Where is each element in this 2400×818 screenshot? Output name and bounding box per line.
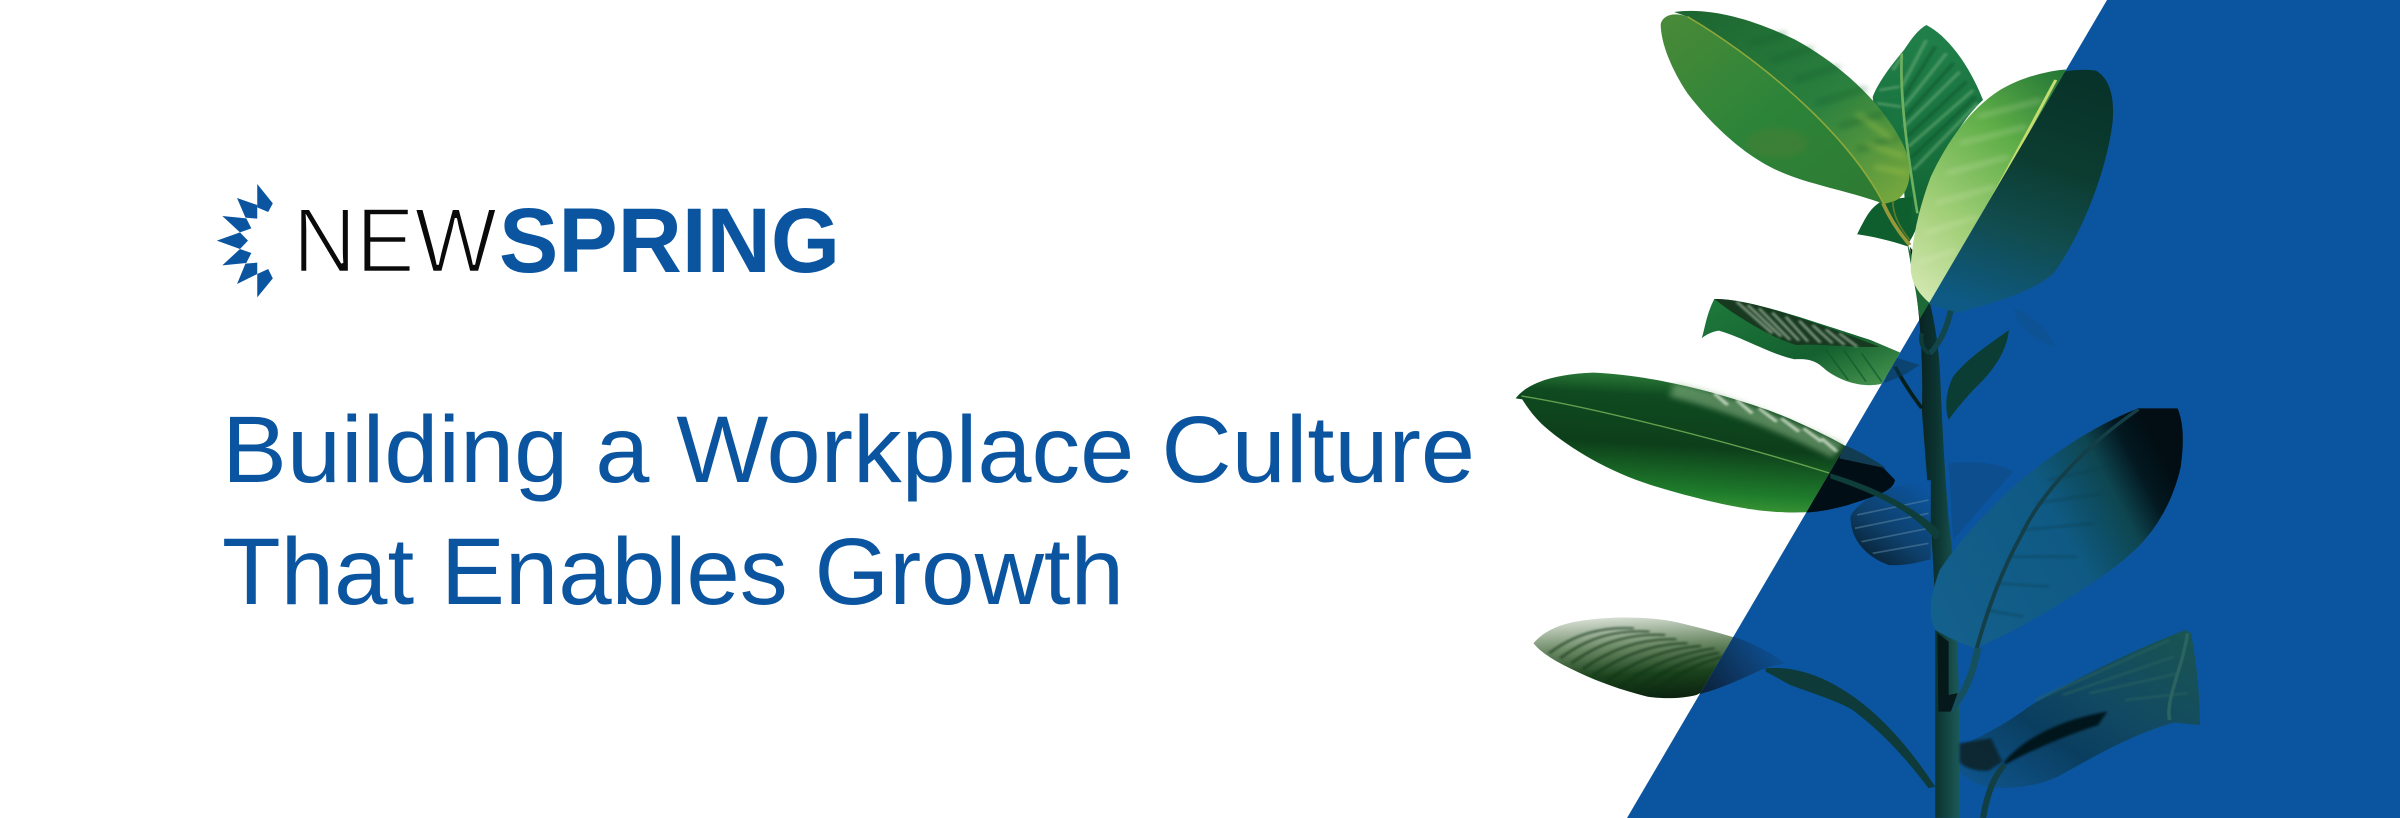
- blue diagonal panel: [1627, 0, 2400, 818]
- leaf: lower-left petiole: [1766, 668, 1935, 788]
- icon: starburst mark: [217, 184, 273, 297]
- title line 2: That Enables Growth: [222, 519, 1124, 625]
- lower left leaf on white: [1533, 617, 1741, 698]
- plant: [1516, 11, 2200, 818]
- title: [222, 397, 1475, 625]
- leaf: top right, two-tone across the diagonal: [1911, 69, 2125, 317]
- leaf: small dark behind stem: [1946, 308, 2056, 420]
- title line 1: Building a Workplace Culture: [222, 397, 1475, 503]
- leaf: large left, two-tone across the diagonal: [1516, 373, 1895, 513]
- leaf: lower left, two-tone across the diagonal: [1533, 617, 1786, 698]
- lower left leaf on blue: [1696, 633, 1786, 695]
- leaf: back top: [1857, 25, 1983, 247]
- leaf: lower right on blue: [1960, 630, 2200, 818]
- stem segment on white: [1908, 246, 1930, 319]
- left leaf on white: [1516, 372, 1846, 512]
- leaf: middle small: [1702, 299, 1920, 385]
- left leaf on blue: [1806, 446, 1895, 512]
- leaf: behind right, striped: [1850, 462, 2013, 565]
- leaf: petiole from big right leaf to stem: [1937, 633, 1978, 712]
- middle leaf on white: [1702, 299, 1902, 385]
- leaf: top left large: [1661, 11, 1910, 245]
- leaf: petiole from left leaf to stem: [1830, 473, 1942, 540]
- middle leaf on blue: [1884, 357, 1920, 383]
- stem: [1895, 247, 1960, 818]
- leaf: big right on blue: [1931, 408, 2183, 648]
- logo wordmark light part: NEW: [293, 190, 497, 292]
- leaf portion on white: [1910, 69, 2066, 303]
- logo wordmark bold part: SPRING: [499, 190, 840, 292]
- leaf portion on blue: [1929, 70, 2113, 313]
- logo: NewSpring: [217, 184, 840, 297]
